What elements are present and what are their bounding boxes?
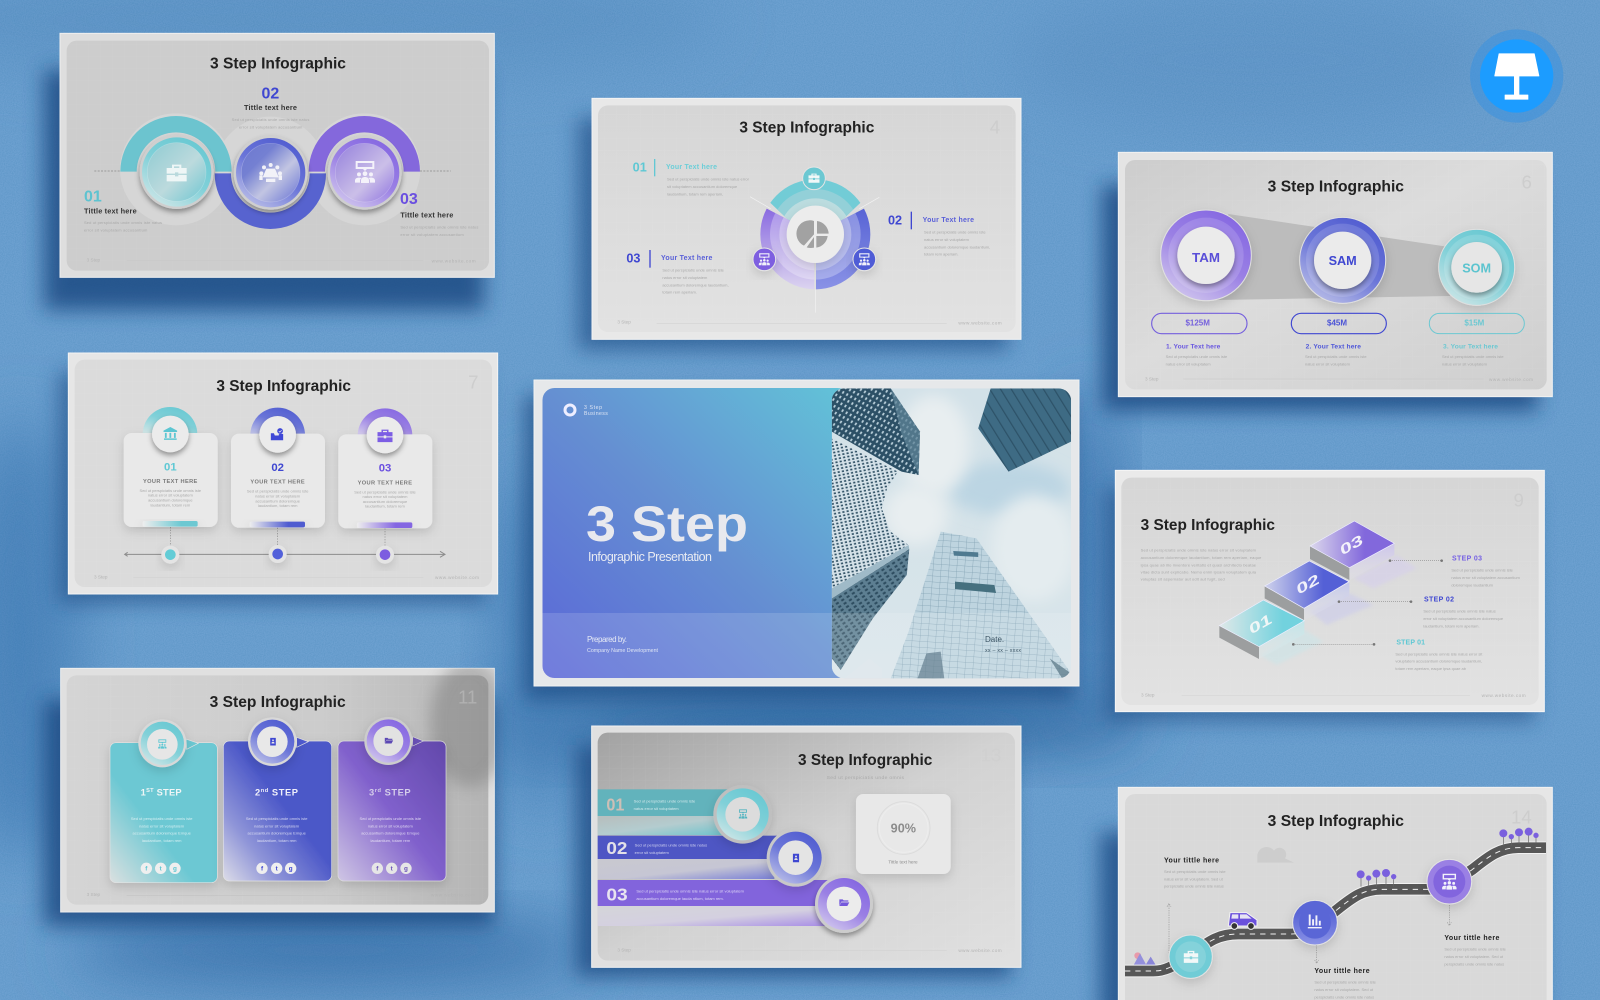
node purple [1427, 859, 1472, 904]
text 01: Your Text here [666, 164, 717, 171]
arrow down 3 [1447, 905, 1451, 926]
TAM circle: TAM [1192, 250, 1220, 265]
card 03: YOUR TEXT HERE [358, 480, 412, 486]
footer [1141, 692, 1526, 698]
card 2nd step: Sed ut perspiciatis unde omnis iste [246, 816, 308, 821]
page number: 11 [458, 686, 477, 707]
text 01: Sed ut perspiciatis unde omnis iste natus error [667, 177, 750, 182]
timeline node 3 [376, 546, 394, 564]
prepared by [587, 635, 659, 654]
slide: cover [534, 380, 1079, 686]
icon: keynote badge [1470, 29, 1563, 123]
text 03: 03 [626, 251, 640, 265]
text 02: natus error sit voluptatem [924, 237, 970, 242]
card 03 [338, 408, 432, 528]
footer [617, 947, 1002, 953]
STEP 02 text: error sit voluptatem accusantium doloremque [1423, 616, 1504, 621]
footer: www.website.com [431, 893, 475, 898]
footer: 3 Step [87, 892, 101, 897]
text 1: Sed ut perspiciatis unde omnis iste [1166, 354, 1228, 359]
intro text: voluptas sit aspernatur aut odit aut fugit, sed [1141, 577, 1225, 582]
text 03: natus error sit voluptatem [662, 275, 708, 280]
text 02: Sed ut perspiciatis unde omnis iste [924, 230, 986, 235]
slide: three arcs timeline [60, 33, 494, 277]
label 01: Sed ut perspiciatis unde omnis iste natus [84, 220, 162, 225]
pill $125M: $125M [1185, 318, 1210, 327]
car [1228, 913, 1257, 929]
bar 02: 02 [606, 838, 627, 858]
label 03 [400, 191, 478, 237]
card 3rd step: Sed ut perspiciatis unde omnis iste [360, 816, 422, 821]
SOM circle [1439, 229, 1515, 305]
card 01 [124, 407, 218, 527]
heading: 3 Step Infographic [1268, 178, 1404, 195]
stat card 90%: Tittle text here [888, 860, 918, 865]
label 01: Tittle text here [84, 207, 137, 216]
leader lines [1292, 559, 1443, 646]
label 02: error sit voluptatem accusantium [239, 124, 303, 129]
step 01: 01 [1248, 610, 1273, 638]
text 03: Your Text here [661, 255, 712, 262]
page number: 6 [1521, 171, 1532, 192]
heading: 3 Step Infographic [216, 378, 351, 395]
text 2: 2. Your Text here [1306, 344, 1361, 351]
intro text: ipsa quae ab illo inventore veritatis et quasi architecto beatae [1141, 562, 1257, 567]
footer [617, 320, 1002, 325]
text 03: Sed ut perspiciatis unde omnis iste [662, 268, 725, 273]
intro text [1141, 548, 1262, 582]
card 2nd step: nd [261, 788, 269, 794]
footer: www.website.com [435, 575, 479, 580]
stat card 90% [856, 794, 951, 874]
footer: 3 Step [1141, 692, 1155, 697]
text 02 [888, 212, 990, 257]
card 03: 03 [379, 463, 391, 475]
card 1st step: ST [146, 788, 154, 794]
text 03 [626, 250, 729, 295]
text middle: Sed ut perspiciatis unde omnis iste [1314, 980, 1377, 985]
heading: 3 Step Infographic [1141, 517, 1275, 534]
arc: purple [309, 116, 420, 172]
node blue [1293, 900, 1337, 945]
slide: donut diagram [592, 98, 1021, 339]
footer [94, 574, 479, 580]
heading: 3 Step Infographic [739, 120, 875, 137]
step 02: 02 [1295, 570, 1321, 598]
card 2nd step: accusantium doloremque Emque [248, 831, 307, 836]
intro text: Sed ut perspiciatis unde omnis iste natus error sit voluptatem [1141, 548, 1257, 553]
text left: natus error sit voluptatem. Sed ut [1164, 876, 1224, 881]
bar 03: Sed ut perspiciatis unde omnis iste natus error sit voluptatem [636, 888, 745, 893]
slide: isometric steps [1115, 470, 1544, 712]
text right: Your tittle here [1444, 935, 1499, 942]
bar 01: 01 [606, 795, 625, 815]
card 1st step: natus error sit voluptatem [139, 823, 185, 828]
card 3rd step [338, 717, 446, 881]
card 1st step: laudantium, totam rem [142, 838, 182, 843]
stat card 90%: 90% [891, 822, 916, 836]
page number: 13 [981, 745, 1001, 766]
text 01 [633, 159, 750, 196]
text 1 [1166, 344, 1228, 366]
STEP 03 text: natus error sit voluptatem accusantium [1451, 575, 1520, 580]
bar 03: 03 [606, 884, 628, 904]
cover gradient panel [542, 388, 850, 678]
card 1st step: STEP [154, 787, 182, 797]
label 03: Sed ut perspiciatis unde omnis iste natus [400, 224, 478, 229]
label 02: 02 [261, 85, 279, 102]
trees middle [1357, 869, 1396, 887]
card 2nd step: laudantium, totam rem [257, 838, 297, 843]
STEP 02 text [1423, 597, 1504, 628]
arc: teal [120, 116, 232, 172]
footer [1145, 376, 1533, 382]
footer: 3 Step [87, 257, 101, 262]
subtitle: Sed ut perspiciatis unde omnis [827, 775, 904, 781]
card 02: natus error sit voluptatem [255, 493, 301, 498]
funnel band [1217, 214, 1450, 300]
bar 01: natus error sit voluptatem [634, 806, 679, 811]
node 02 [234, 136, 308, 210]
step 02 [1265, 561, 1373, 625]
text 03: accusantium doloremque laudantium, [662, 282, 729, 287]
arrow up [1167, 903, 1171, 953]
arc: blue [215, 173, 326, 229]
card 3rd step: g [404, 866, 408, 873]
text 2 [1305, 344, 1367, 366]
card 3rd step: STEP [381, 787, 411, 797]
card 2nd step: 2 [255, 787, 260, 797]
timeline arrow [125, 527, 445, 557]
pill $45M: $45M [1327, 318, 1347, 327]
wedge: purple [760, 208, 814, 290]
node 01 [140, 135, 214, 209]
page number: 7 [468, 371, 479, 392]
card 03: Sed ut perspiciatis unde omnis iste [354, 489, 417, 494]
card 2nd step: f [261, 866, 264, 873]
text right: Sed ut perspiciatis unde omnis iste [1444, 947, 1507, 952]
card 03: laudantium, totam rem [365, 504, 405, 509]
heading: 3 Step Infographic [210, 56, 346, 73]
bar 03 [598, 880, 828, 926]
text left: Sed ut perspiciatis unde omnis iste [1164, 869, 1226, 874]
text 02: accusantium doloremque laudantium, [924, 244, 990, 249]
card 1st step: g [173, 866, 177, 873]
text 2: natus error sit voluptatem [1305, 361, 1351, 366]
card 2nd step: g [289, 866, 293, 873]
STEP 02 text: laudantium, totam rem aperiam. [1423, 623, 1480, 628]
footer: 3 Step [94, 574, 108, 579]
date [985, 635, 1021, 654]
bar 01: Sed ut perspiciatis unde omnis iste [634, 798, 696, 803]
intro text: vitae dicta sunt explicabo. Nemo enim ipsam voluptatem quia [1141, 569, 1257, 574]
text 01: 01 [633, 160, 647, 174]
page number: 3 [464, 53, 474, 74]
arrow down 2 [1315, 945, 1319, 963]
slide: step cards [61, 660, 510, 912]
date: Date. [985, 635, 1004, 644]
card 01: 01 [164, 461, 177, 473]
footer: 3 Step [617, 320, 631, 325]
card 02: YOUR TEXT HERE [250, 480, 305, 486]
heading: 3 Step Infographic [210, 694, 346, 711]
icon badge purple [753, 248, 776, 271]
text 3 [1442, 344, 1504, 366]
cloud [1257, 847, 1294, 863]
heading: 3 Step Infographic [798, 752, 933, 769]
card 2nd step [223, 717, 332, 881]
icon badge teal [803, 167, 825, 190]
card 02: Sed ut perspiciatis unde omnis iste [247, 489, 309, 494]
bar 02 [598, 836, 778, 879]
card 03: accusantium doloremque [363, 499, 408, 504]
logo: 3 Step [584, 405, 603, 411]
card 02: 02 [271, 462, 284, 474]
faint guide lines [750, 197, 879, 313]
footer: www.website.com [1482, 693, 1526, 698]
label 01: error sit voluptatem accusantium [84, 228, 148, 233]
text 1: natus error sit voluptatem [1166, 361, 1211, 366]
wedge: teal [770, 180, 860, 220]
pill $125M [1152, 313, 1247, 334]
text right: natus error sit voluptatem. Sed ut [1444, 954, 1504, 959]
circle 03 [815, 875, 873, 933]
timeline node 1 [161, 546, 179, 564]
text left: perspiciatis unde omnis iste natus [1164, 884, 1224, 889]
text 02: 02 [888, 213, 902, 227]
card 3rd step: t [391, 866, 394, 873]
card 3rd step: natus error sit voluptatem [368, 823, 413, 828]
node teal [1169, 935, 1212, 978]
bar 02: error sit voluptatem [635, 850, 669, 855]
card 3rd step: rd [375, 788, 381, 794]
mountains [1133, 952, 1156, 966]
cover subtitle: Infographic Presentation [588, 550, 712, 564]
text 01: laudantium, totam rem aperiam, [667, 191, 723, 196]
card 1st step: f [145, 866, 148, 873]
label 03: error sit voluptatem accusantium [400, 232, 464, 237]
footer: 3 Step [1145, 376, 1159, 381]
cover title: 3 Step [586, 496, 748, 552]
card 1st step [110, 719, 217, 883]
text left: Your tittle here [1164, 858, 1219, 865]
card 2nd step: t [276, 866, 279, 873]
STEP 02 text: Sed ut perspiciatis unde omnis iste natus [1423, 609, 1496, 614]
STEP 01 text: Sed ut perspiciatis unde omnis iste natus error sit [1395, 651, 1483, 656]
footer [87, 892, 475, 898]
step 03: 03 [1339, 531, 1364, 559]
slide: three cards with timeline [68, 353, 498, 594]
photo: skyscrapers [832, 388, 1076, 678]
text middle [1314, 968, 1377, 999]
STEP 01 text: STEP 01 [1396, 639, 1425, 646]
text 3: natus error sit voluptatem [1442, 361, 1488, 366]
prepared by: Prepared by. [587, 635, 627, 644]
page number: 9 [1513, 490, 1524, 511]
label 02 [232, 85, 309, 129]
footer: www.website.com [1489, 377, 1533, 382]
card 03: natus error sit voluptatem [363, 494, 408, 499]
text 02: totam rem aperiam. [924, 252, 959, 257]
logo: Business [584, 411, 608, 417]
bar 01 [598, 789, 732, 835]
card 2nd step: natus error sit voluptatem [254, 823, 300, 828]
label 03: 03 [400, 191, 418, 208]
card 01: laudantium, totam rem [151, 502, 191, 507]
circle 01 [713, 785, 772, 844]
page number: 4 [990, 116, 1000, 137]
label 03: Tittle text here [400, 211, 453, 220]
STEP 01 text: totam rem aperiam, eaque ipsa quae ab [1395, 666, 1467, 671]
footer: www.website.com [958, 320, 1002, 325]
date: xx – xx – xxxx [985, 648, 1021, 654]
arrow line [94, 170, 451, 172]
footer: www.website.com [958, 948, 1002, 953]
STEP 03 text: doloremque laudantium [1451, 582, 1494, 587]
text 1: 1. Your Text here [1166, 344, 1221, 351]
text 03: totam rem aperiam. [662, 290, 697, 295]
card 1st step: 1 [141, 787, 146, 797]
card 1st step: accusantium doloremque Emque [133, 831, 192, 836]
SOM circle: SOM [1462, 261, 1491, 275]
text 01: sit voluptatem accusantium doloremque [667, 184, 738, 189]
STEP 03 text [1451, 556, 1520, 587]
slide: TAM SAM SOM [1118, 152, 1552, 397]
heading: 3 Step Infographic [1268, 813, 1404, 830]
label 01: 01 [84, 188, 102, 205]
card 02: accusantium doloremque [255, 498, 301, 503]
page number: 14 [1511, 806, 1532, 827]
card 3rd step: f [376, 866, 379, 873]
circle 02 [767, 829, 825, 887]
card 1st step: Sed ut perspiciatis unde omnis iste [131, 816, 193, 821]
bottom translucent band [542, 613, 1071, 678]
card 3rd step: accusantium doloremque Emque [361, 831, 420, 836]
node 03 [328, 136, 402, 210]
text right [1444, 935, 1507, 966]
STEP 01 text: voluptatem accusantium doloremque laudantium, [1395, 659, 1482, 664]
timeline node 2 [269, 545, 287, 563]
icon badge blue [853, 248, 876, 271]
halo discs [120, 113, 420, 229]
centre pie [787, 206, 844, 263]
bar 02: Sed ut perspiciatis unde omnis iste natus [635, 843, 707, 848]
road [1125, 848, 1546, 971]
bar 03: accusantium doloremque lauda ntium, totam rem. [636, 896, 724, 901]
logo [565, 405, 608, 417]
text middle: perspiciatis unde omnis iste natus [1314, 994, 1374, 999]
STEP 01 text [1395, 639, 1483, 671]
footer [87, 257, 476, 263]
pill $45M [1291, 313, 1386, 334]
card 01: natus error sit voluptatem [148, 493, 193, 498]
slide: road map [1118, 787, 1552, 1000]
card 1st step: t [160, 866, 163, 873]
pill $15M: $15M [1464, 318, 1485, 327]
footer: 3 Step [617, 947, 631, 952]
STEP 02 text: STEP 02 [1424, 597, 1454, 604]
footer: www.website.com [432, 258, 476, 263]
intro text: accusantium doloremque laudantium, totam rem aperiam, eaque [1141, 555, 1262, 560]
card 01: YOUR TEXT HERE [143, 479, 198, 485]
SAM circle [1300, 217, 1386, 303]
text middle: Your tittle here [1314, 968, 1370, 975]
text left [1164, 858, 1226, 889]
card 3rd step: 3 [369, 787, 374, 797]
pill $15M [1429, 313, 1524, 334]
text middle: natus error sit voluptatem. Sed ut [1314, 987, 1374, 992]
label 02: Tittle text here [244, 103, 297, 112]
wedge: blue [816, 208, 870, 290]
text 3: Sed ut perspiciatis unde omnis iste [1442, 354, 1504, 359]
card 02: laudantium, totam rem [258, 503, 298, 508]
prepared by: Company Name Development [587, 648, 659, 654]
card 3rd step: laudantium, totam rem [371, 838, 411, 843]
slide: staggered bars [592, 726, 1021, 967]
STEP 03 text: Sed ut perspiciatis unde omnis iste [1451, 568, 1514, 573]
card 01: accusantium doloremque [148, 498, 193, 503]
SAM circle: SAM [1329, 254, 1357, 268]
trees upper [1499, 828, 1539, 845]
label 01 [84, 188, 162, 233]
text 2: Sed ut perspiciatis unde omnis iste [1305, 354, 1367, 359]
card 02 [231, 408, 325, 528]
step 01 [1219, 600, 1323, 665]
card 01: Sed ut perspiciatis unde omnis iste [140, 488, 202, 493]
text 02: Your Text here [923, 217, 974, 224]
text 3: 3. Your Text here [1443, 344, 1498, 351]
card 2nd step: STEP [269, 787, 298, 797]
TAM circle [1161, 210, 1251, 301]
STEP 03 text: STEP 03 [1452, 556, 1482, 563]
step 03 [1310, 521, 1417, 588]
text right: perspiciatis unde omnis iste natus [1444, 961, 1504, 966]
label 02: Sed ut perspiciatis unde omnis iste natus [232, 117, 309, 122]
